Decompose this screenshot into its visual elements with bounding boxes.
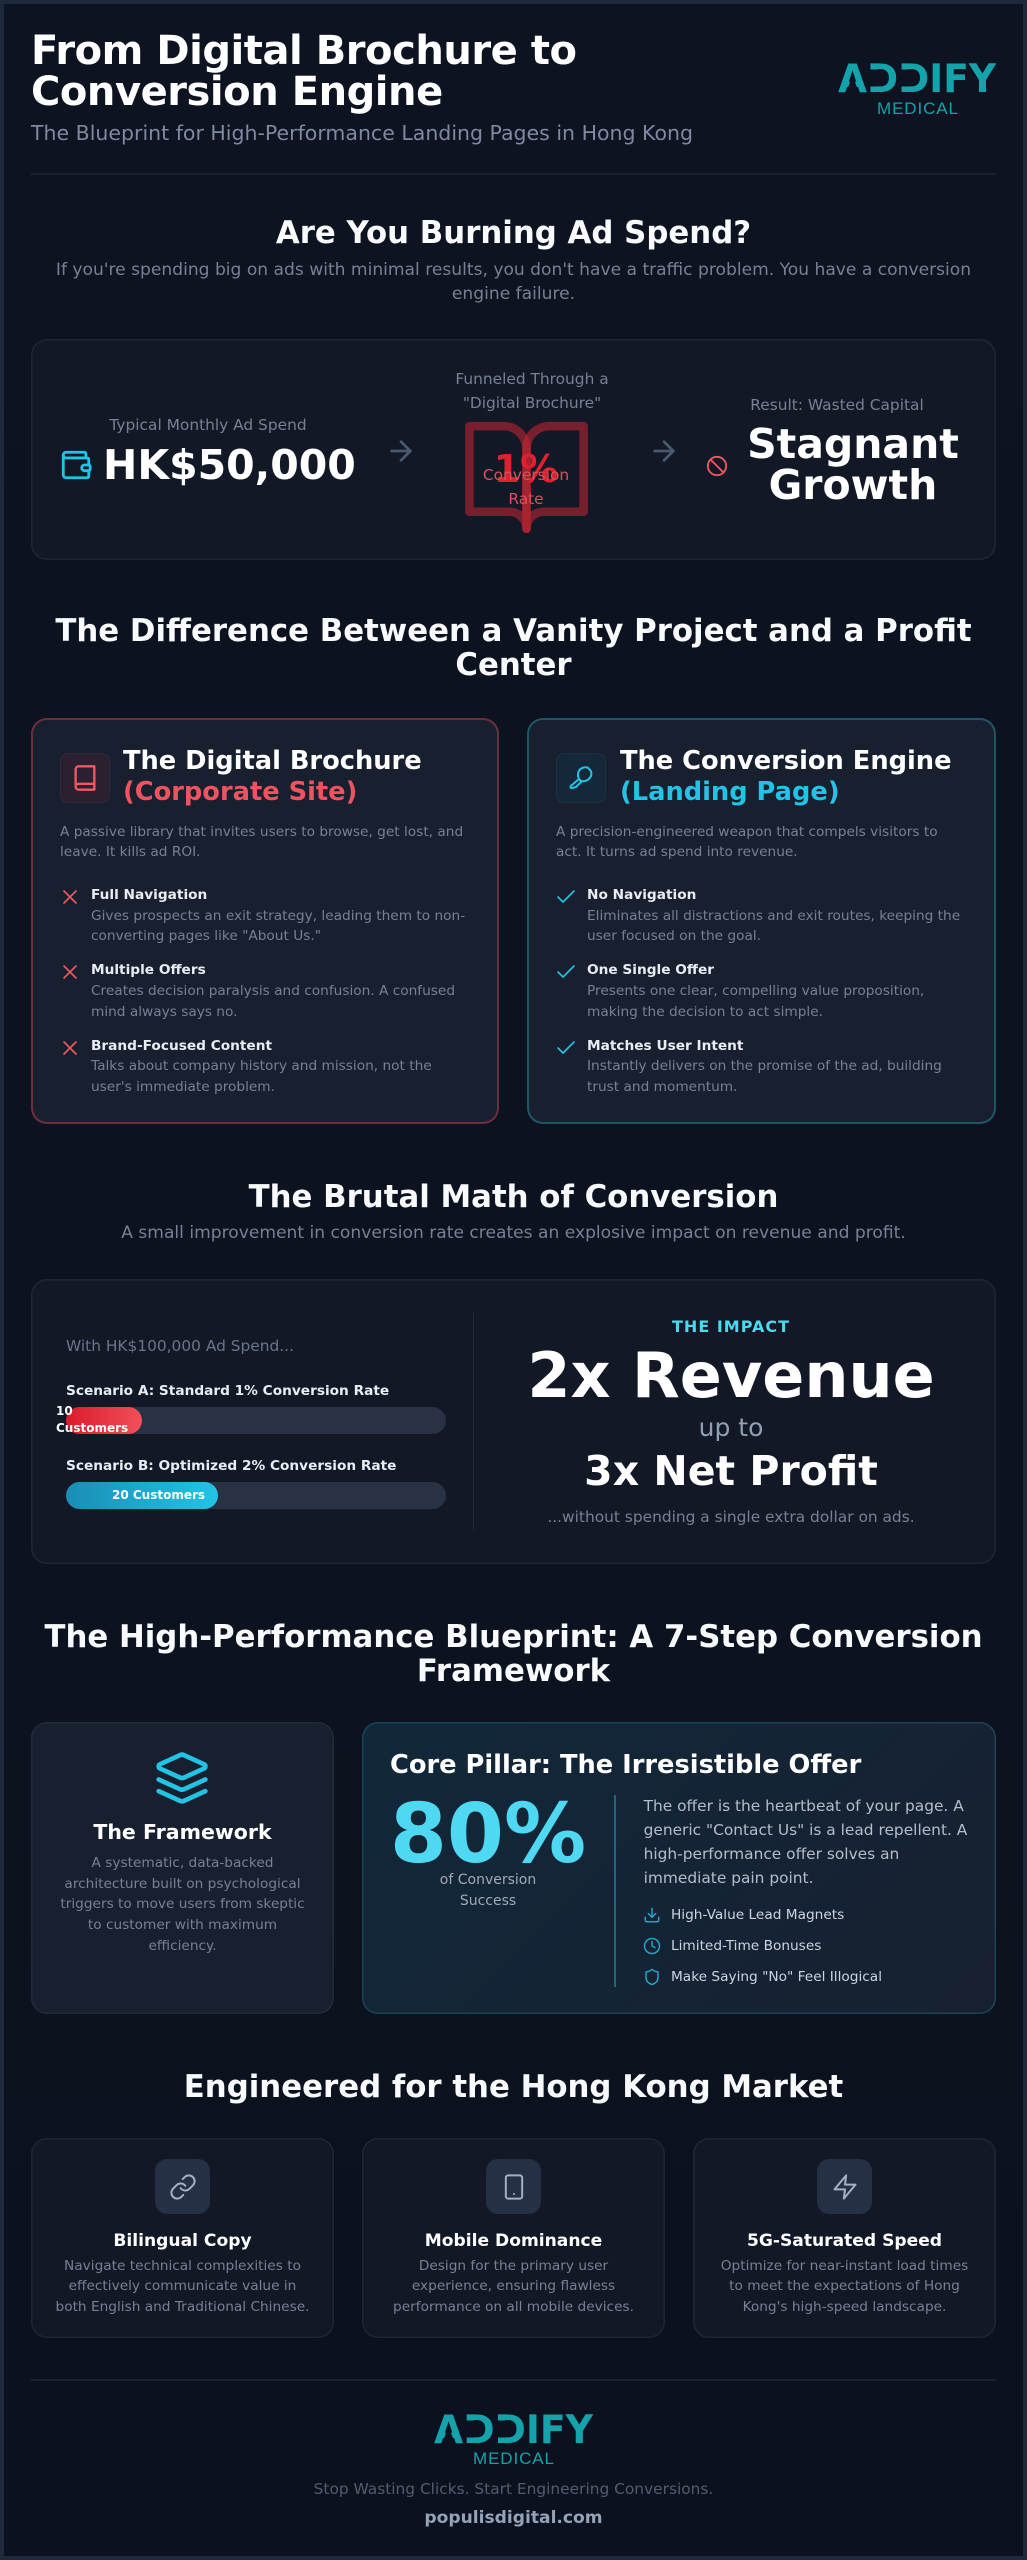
text: speed description: Optimize for near-instant load times xyxy=(721,2258,968,2274)
item: brand-focused content: Brand-Focused Content xyxy=(91,1038,272,1054)
item: multiple offers: mind always says no. xyxy=(91,1004,237,1020)
text: bilingual description xyxy=(56,2258,309,2315)
section heading: brutal math: The Brutal Math of Conversion xyxy=(249,1178,778,1214)
section heading: blueprint: Framework xyxy=(417,1653,610,1689)
text: framework description: to customer with maximum xyxy=(88,1917,277,1933)
item: multiple offers xyxy=(63,962,455,1020)
section heading: vanity vs profit xyxy=(55,613,972,683)
text: offer description: generic "Contact Us" is a lead repellent. A xyxy=(644,1821,967,1839)
panel: core pillar xyxy=(362,1722,996,2014)
item: multiple offers: Creates decision paralysis and confusion. A confused xyxy=(91,983,455,999)
text: speed description: to meet the expectations of Hong xyxy=(729,2278,960,2294)
text: offer description xyxy=(644,1797,968,1887)
item: no navigation: user focused on the goal. xyxy=(587,928,761,944)
text: offer description: The offer is the heartbeat of your page. A xyxy=(644,1797,964,1815)
item: full navigation: converting pages like "About Us." xyxy=(91,928,321,944)
section heading: blueprint: The High-Performance Blueprint: A 7-Step Conversion xyxy=(44,1619,983,1655)
section intro: burning ad spend xyxy=(56,260,971,304)
section heading: hong kong market: Engineered for the Hong Kong Market xyxy=(184,2068,843,2104)
section intro: burning ad spend: engine failure. xyxy=(452,284,575,304)
item: no navigation: No Navigation xyxy=(587,887,696,903)
icon: open book xyxy=(465,422,588,534)
label: ad spend scenario: With HK$100,000 Ad Spend... xyxy=(66,1337,294,1355)
text: framework description: A systematic, data-backed xyxy=(92,1855,273,1871)
panel: ad spend flow xyxy=(31,339,996,560)
text: bilingual description: effectively communicate value in xyxy=(69,2278,296,2294)
bar: scenario A xyxy=(66,1407,446,1434)
heading: the framework: The Framework xyxy=(93,1820,272,1844)
text: engine description xyxy=(556,824,938,860)
item: one single offer: One Single Offer xyxy=(587,962,714,978)
text: speed description xyxy=(721,2258,968,2315)
text: framework description: architecture built on psychological xyxy=(64,1876,301,1892)
label: conversion rate: Conversion xyxy=(483,466,569,484)
text: framework description: efficiency. xyxy=(148,1938,217,1954)
item: full navigation xyxy=(63,887,465,944)
text: offer description: immediate pain point. xyxy=(644,1869,813,1887)
stat: 2x revenue: 2x Revenue xyxy=(527,1339,935,1412)
arrow: brochure to result xyxy=(653,440,675,462)
section heading: burning ad spend: Are You Burning Ad Spend? xyxy=(276,215,751,251)
text: without extra spend: ...without spending a single extra dollar on ads. xyxy=(547,1508,915,1526)
heading: the conversion engine: (Landing Page) xyxy=(620,776,840,806)
panel: math of conversion xyxy=(31,1279,996,1564)
text: mobile description xyxy=(393,2258,634,2315)
item: brand-focused content: Talks about company history and mission, not the xyxy=(91,1058,432,1074)
icon: book xyxy=(60,753,110,803)
item: limited-time bonuses: Limited-Time Bonuses xyxy=(671,1938,821,1954)
item: matches user intent: trust and momentum. xyxy=(587,1079,737,1095)
icon: rocket xyxy=(556,753,606,803)
heading: the digital brochure: The Digital Brochure xyxy=(123,746,422,776)
logo: Addify Medical footer: MEDICAL xyxy=(473,2449,554,2468)
item: one single offer xyxy=(557,962,924,1020)
stat: stagnant growth: Stagnant xyxy=(747,420,959,468)
icon: lightning bolt xyxy=(817,2159,872,2214)
item: make saying no illogical: Make Saying "No" Feel Illogical xyxy=(671,1968,882,1984)
stat: 1%: 1% xyxy=(494,447,558,491)
title xyxy=(31,28,577,115)
title: Conversion Engine xyxy=(31,69,443,115)
section heading: vanity vs profit: Center xyxy=(455,647,572,683)
footer tagline: Stop Wasting Clicks. Start Engineering Conversions. xyxy=(314,2480,713,2498)
label: conversion rate: Rate xyxy=(508,490,544,508)
bar: scenario B: 20 Customers xyxy=(112,1488,205,1502)
stat: stagnant growth: Growth xyxy=(769,461,937,509)
heading: the conversion engine: The Conversion Engine xyxy=(620,746,952,776)
heading: 5G-saturated speed: 5G-Saturated Speed xyxy=(747,2231,942,2251)
stat: 80%: 80% xyxy=(390,1787,586,1882)
section heading: blueprint xyxy=(44,1619,983,1689)
heading: the digital brochure: (Corporate Site) xyxy=(123,776,357,806)
label: scenario B: Scenario B: Optimized 2% Conversion Rate xyxy=(66,1458,396,1474)
heading: the conversion engine xyxy=(620,746,952,806)
panel: math of conversion: 10 xyxy=(56,1404,73,1418)
section intro: burning ad spend: If you're spending big on ads with minimal results, you don't have a traffic problem. You have a conversion xyxy=(56,260,971,280)
item: brand-focused content: user's immediate problem. xyxy=(91,1079,275,1095)
text: up to: up to xyxy=(699,1413,763,1442)
item: brand-focused content xyxy=(63,1038,432,1095)
section heading: vanity vs profit: The Difference Between a Vanity Project and a Profit xyxy=(55,613,972,649)
footer website: populisdigital.com xyxy=(424,2508,603,2528)
text: brochure description xyxy=(60,824,463,860)
section intro: brutal math: A small improvement in conversion rate creates an explosive impact on revenue and profit. xyxy=(121,1223,906,1243)
title: From Digital Brochure to xyxy=(31,28,577,74)
item: no navigation: Eliminates all distractions and exit routes, keeping the xyxy=(587,908,960,924)
label: funneled through digital brochure: "Digital Brochure" xyxy=(463,394,601,412)
text: engine description: act. It turns ad spend into revenue. xyxy=(556,844,798,860)
item: lead magnets: High-Value Lead Magnets xyxy=(671,1907,844,1923)
text: framework description xyxy=(60,1855,305,1954)
text: brochure description: A passive library that invites users to browse, get lost, and xyxy=(60,824,463,840)
panel: 5G speed xyxy=(693,2138,996,2338)
heading: bilingual copy: Bilingual Copy xyxy=(113,2231,252,2251)
item: no navigation xyxy=(557,887,960,944)
item: multiple offers: Multiple Offers xyxy=(91,962,206,978)
icon: ban xyxy=(706,456,728,476)
stat: stagnant growth xyxy=(747,420,959,509)
text: speed description: Kong's high-speed landscape. xyxy=(743,2299,946,2315)
label: of conversion success: of Conversion xyxy=(440,1872,536,1888)
label: typical monthly ad spend: Typical Monthly Ad Spend xyxy=(109,416,307,434)
panel: digital brochure xyxy=(31,718,499,1124)
label: conversion rate xyxy=(483,466,569,508)
icon: layers xyxy=(156,1752,208,1804)
label: funneled through digital brochure: Funneled Through a xyxy=(455,370,609,388)
heading: core pillar: Core Pillar: The Irresistible Offer xyxy=(390,1750,861,1780)
stat: HK$50,000: HK$50,000 xyxy=(103,441,356,489)
logo: Addify Medical header: MEDICAL xyxy=(877,99,958,118)
label: funneled through digital brochure xyxy=(455,370,609,412)
text: framework description: triggers to move users from skeptic xyxy=(60,1896,305,1912)
label: result wasted capital: Result: Wasted Capital xyxy=(750,396,924,414)
panel: the framework xyxy=(31,1722,334,2014)
label: of conversion success: Success xyxy=(460,1892,516,1908)
item: one single offer: Presents one clear, compelling value proposition, xyxy=(587,983,924,999)
bar: scenario A: Customers xyxy=(56,1420,128,1434)
text: bilingual description: Navigate technical complexities to xyxy=(64,2258,301,2274)
text: bilingual description: both English and Traditional Chinese. xyxy=(56,2299,309,2315)
item: full navigation: Gives prospects an exit strategy, leading them to non- xyxy=(91,908,465,924)
item: one single offer: making the decision to act simple. xyxy=(587,1004,823,1020)
icon: link xyxy=(155,2159,210,2214)
heading: the digital brochure xyxy=(123,746,422,806)
item: matches user intent: Instantly delivers on the promise of the ad, building xyxy=(587,1058,942,1074)
text: engine description: A precision-engineered weapon that compels visitors to xyxy=(556,824,938,840)
item: matches user intent: Matches User Intent xyxy=(587,1038,743,1054)
label: the impact: THE IMPACT xyxy=(672,1317,790,1336)
text: mobile description: performance on all mobile devices. xyxy=(393,2299,634,2315)
arrow: spend to brochure xyxy=(390,440,412,462)
text: mobile description: Design for the primary user xyxy=(419,2258,608,2274)
item: full navigation: Full Navigation xyxy=(91,887,207,903)
icon: wallet xyxy=(62,450,92,480)
stat: 3x net profit: 3x Net Profit xyxy=(584,1447,878,1495)
bar: scenario B xyxy=(66,1482,446,1509)
panel: bilingual copy xyxy=(31,2138,334,2338)
text: brochure description: leave. It kills ad ROI. xyxy=(60,844,201,860)
item: matches user intent xyxy=(557,1038,942,1095)
icon: smartphone xyxy=(486,2159,541,2214)
subtitle: The Blueprint for High-Performance Landing Pages in Hong Kong xyxy=(31,121,693,145)
label: of conversion success xyxy=(440,1872,536,1908)
panel: conversion engine xyxy=(527,718,996,1124)
panel: mobile dominance xyxy=(362,2138,665,2338)
label: scenario A: Scenario A: Standard 1% Conversion Rate xyxy=(66,1382,389,1398)
text: offer description: high-performance offer solves an xyxy=(644,1845,899,1863)
heading: mobile dominance: Mobile Dominance xyxy=(425,2231,602,2251)
text: mobile description: experience, ensuring flawless xyxy=(412,2278,615,2294)
